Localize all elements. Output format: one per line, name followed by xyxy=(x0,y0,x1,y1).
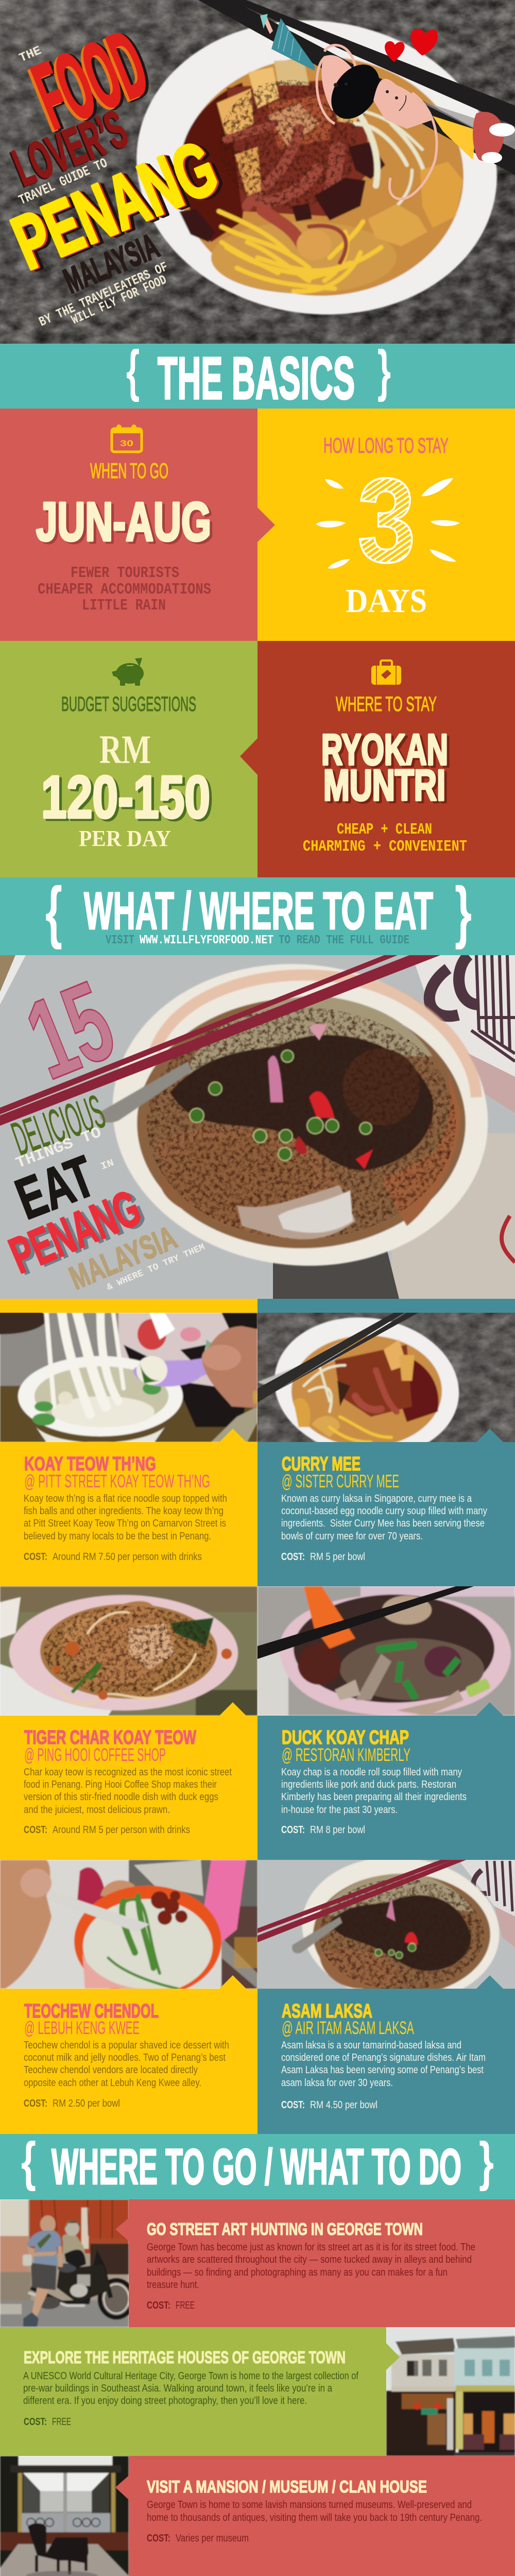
food card: asam laksa xyxy=(258,1848,515,2134)
title: LOVER'S: LOVER’S xyxy=(6,99,135,197)
description xyxy=(147,2242,475,2291)
label: when to go: WHEN TO GO xyxy=(90,459,168,483)
description: and the juiciest, most delicious prawn. xyxy=(24,1804,170,1816)
section banner: the basics: THE BASICS xyxy=(158,345,355,412)
reasons list: FEWER TOURISTS xyxy=(71,564,179,582)
title: MALAYSIA: MALAYSIA xyxy=(58,226,164,301)
icon: maroon chopsticks xyxy=(258,1860,466,1942)
panel: where to stay xyxy=(240,641,515,877)
panel: how long to stay xyxy=(258,409,515,641)
cost: FREE xyxy=(176,2300,195,2311)
title: and where to try them: & WHERE TO TRY THEM xyxy=(106,1242,207,1293)
stall name: @ PING HOOI COFFEE SHOP xyxy=(24,1745,166,1765)
photo: chendol xyxy=(0,1860,258,1989)
title: 15: 15 xyxy=(10,957,130,1104)
section banner: the basics: { xyxy=(126,339,140,402)
text panel: asam laksa xyxy=(258,1989,515,2134)
activity card: mansion museum clan house xyxy=(0,2456,515,2576)
title block: 15 delicious things to eat in Penang: DELICIOUS xyxy=(6,1086,111,1165)
title: THE: THE xyxy=(18,44,44,65)
section banner: where to go / what to do: } xyxy=(479,2131,494,2192)
description: in-house for the past 30 years. xyxy=(281,1804,398,1816)
description xyxy=(147,2499,482,2523)
link line: visit site to read guide: TO READ THE FULL GUIDE xyxy=(279,934,409,947)
title block: the food lover's travel guide to Penang Malaysia xyxy=(1,10,229,330)
title: penang: PENANG xyxy=(2,1179,148,1284)
dish name: KOAY TEOW TH’NG xyxy=(24,1453,156,1475)
cost xyxy=(147,2300,195,2311)
icon: chopsticks xyxy=(258,1313,418,1402)
icon: calendar: 30 xyxy=(120,438,133,448)
text panel: mansion xyxy=(129,2456,515,2576)
panel: when to go xyxy=(0,409,275,641)
section banner: where to go / what to do: { xyxy=(21,2131,36,2192)
icon: chopsticks xyxy=(258,1586,474,1659)
section banner: the basics: } xyxy=(377,339,391,402)
cost: RM 4.50 per bowl xyxy=(310,2099,377,2111)
description: Teochew chendol vendors are located directly xyxy=(24,2064,198,2076)
value: RM: RM xyxy=(99,727,151,772)
divider colour strip above food grid xyxy=(0,1299,515,1313)
cost: Around RM 7.50 per person with drinks xyxy=(53,1551,202,1563)
activity name: VISIT A MANSION / MUSEUM / CLAN HOUSE xyxy=(147,2477,427,2496)
cost: Around RM 5 per person with drinks xyxy=(53,1824,190,1836)
icon: hearts xyxy=(385,29,438,62)
section banner: the basics xyxy=(0,339,515,412)
dish name: ASAM LAKSA xyxy=(282,2001,372,2022)
icon: cartoon man on chopsticks xyxy=(373,79,515,199)
value: ryokan muntri: MUNTRI xyxy=(323,761,445,809)
cost: COST: xyxy=(281,2099,305,2111)
description: opposite each other at Lebuh Keng Kwee alley. xyxy=(24,2077,201,2089)
cost xyxy=(24,2098,120,2109)
icon: piggy bank xyxy=(112,658,144,686)
description xyxy=(24,1493,227,1542)
cost: RM 5 per bowl xyxy=(310,1551,365,1563)
description: believed by many locals to be the best in Penang. xyxy=(24,1531,211,1542)
description: treasure hunt. xyxy=(147,2279,199,2291)
text panel: teochew chendol xyxy=(0,1989,258,2134)
link line: visit site to read guide: WWW.WILLFLYFORFOOD.NET xyxy=(140,934,273,947)
dish name: TIGER CHAR KOAY TEOW xyxy=(24,1727,196,1749)
features list: CHARMING + CONVENIENT xyxy=(303,838,467,856)
icon: suitcase xyxy=(371,660,401,685)
food card: koay teow th'ng xyxy=(0,1303,258,1586)
description: buildings — so finding and photographing as many as you can makes for a fun xyxy=(147,2267,448,2278)
dish name: CURRY MEE xyxy=(282,1453,360,1475)
photo: heritage shophouses xyxy=(386,2327,515,2456)
title block: 15 delicious things to eat in Penang xyxy=(2,957,207,1297)
photo: curry mee xyxy=(258,1313,515,1442)
stall name: @ LEBUH KENG KWEE xyxy=(24,2018,140,2038)
description: Kimberly has been preparing all their ingredients xyxy=(281,1791,467,1803)
description: Teochew chendol is a popular shaved ice dessert with xyxy=(24,2040,229,2051)
cost: COST: xyxy=(24,1551,47,1563)
description xyxy=(281,1493,487,1542)
cost: COST: xyxy=(24,1824,47,1836)
value: per day: PER DAY xyxy=(79,826,171,851)
description: Char koay teow is recognized as the most iconic street xyxy=(24,1767,232,1778)
title: in: IN xyxy=(99,1157,115,1173)
title: eat: EAT xyxy=(8,1144,103,1231)
food card: tiger char koay teow xyxy=(0,1586,258,1860)
description: A UNESCO World Cultural Heritage City, George Town is home to the largest collection of xyxy=(23,2370,358,2382)
link line: visit site to read guide: VISIT xyxy=(106,934,134,947)
cost xyxy=(281,1824,365,1836)
value: big 3: 3 xyxy=(357,454,416,587)
description: coconut milk and jelly noodles. Two of Penang’s best xyxy=(24,2052,226,2063)
cost: COST: xyxy=(24,2098,47,2109)
title: will fly for food: WILL FLY FOR FOOD xyxy=(69,272,169,328)
description xyxy=(281,1767,467,1816)
stall name: @ RESTORAN KIMBERLY xyxy=(282,1745,410,1765)
label: where to stay: WHERE TO STAY xyxy=(336,693,437,716)
description xyxy=(23,2370,358,2406)
cost: COST: xyxy=(147,2533,170,2544)
description: pre-war buildings in Southeast Asia. Walking around town, it feels like you’re in a xyxy=(23,2383,333,2394)
icon: sunburst rays around 3 xyxy=(316,478,460,569)
cost: COST: xyxy=(147,2300,170,2311)
cost xyxy=(147,2533,249,2544)
photo: char koay teow xyxy=(0,1586,258,1716)
value: ryokan muntri xyxy=(321,725,448,809)
photo: man with street art motorbike xyxy=(0,2199,129,2327)
text panel: heritage houses xyxy=(0,2327,386,2456)
text panel: koay teow th'ng xyxy=(0,1442,258,1586)
activity name: EXPLORE THE HERITAGE HOUSES OF GEORGE TOWN xyxy=(24,2348,346,2367)
title: by the traveleaters: BY THE TRAVELEATERS OF xyxy=(37,259,170,330)
description: asam laksa for over 30 years. xyxy=(281,2077,393,2089)
cost xyxy=(281,1551,365,1563)
cost: RM 8 per bowl xyxy=(310,1824,365,1836)
features list: CHEAP + CLEAN xyxy=(337,821,432,839)
description: fish balls and other ingredients. The koay teow th’ng xyxy=(24,1505,224,1517)
description: Koay chap is a noodle roll soup filled with many xyxy=(281,1767,462,1778)
description: different era. If you enjoy doing street photography, then you’ll love it here. xyxy=(23,2395,307,2406)
dish name: TEOCHEW CHENDOL xyxy=(24,2001,159,2022)
photo: duck koay chap xyxy=(258,1586,515,1716)
description xyxy=(24,1767,232,1816)
photo: asam laksa xyxy=(258,1860,515,1989)
stall name: @ PITT STREET KOAY TEOW TH’NG xyxy=(24,1471,210,1492)
value: ryokan muntri: RYOKAN xyxy=(321,725,448,774)
hero panel: 15 delicious things to eat, asam laksa photo xyxy=(0,945,515,1299)
photo: mansion interior xyxy=(0,2456,129,2576)
description: at Pitt Street Koay Teow Th’ng on Carnarvon Street is xyxy=(24,1518,226,1529)
food card: duck koay chap xyxy=(258,1586,515,1860)
link line: visit site to read guide xyxy=(106,934,409,947)
cost: FREE xyxy=(52,2416,71,2428)
cost xyxy=(24,2416,71,2428)
title: things to: THINGS TO xyxy=(13,1124,104,1173)
cost: COST: xyxy=(281,1824,305,1836)
description: Known as curry laksa in Singapore, curry mee is a xyxy=(281,1493,472,1504)
cost: COST: xyxy=(281,1551,305,1563)
description: Koay teow th’ng is a flat rice noodle soup topped with xyxy=(24,1493,227,1504)
section banner: what / where to eat xyxy=(0,873,515,955)
dish name: DUCK KOAY CHAP xyxy=(282,1727,409,1749)
title: TRAVEL GUIDE TO: TRAVEL GUIDE TO xyxy=(16,156,110,209)
reasons list xyxy=(38,564,211,615)
section banner: what / where to eat: { xyxy=(45,873,62,950)
features list xyxy=(303,821,467,856)
description: version of this stir-fried noodle dish with duck eggs xyxy=(24,1791,218,1803)
hero panel: food lover's guide title over curry mee photo xyxy=(0,0,515,344)
value: days: DAYS xyxy=(346,582,427,620)
icon: calendar xyxy=(112,425,142,452)
value: 120-150: 120-150 xyxy=(41,764,210,831)
activity card: heritage houses xyxy=(0,2327,515,2456)
icon: cartoon girl on chopsticks xyxy=(260,14,389,128)
cost: RM 2.50 per bowl xyxy=(53,2098,120,2109)
reasons list: CHEAPER ACCOMMODATIONS xyxy=(38,581,211,599)
title: malaysia: MALAYSIA xyxy=(64,1218,182,1297)
text panel: street art hunting xyxy=(129,2199,515,2327)
cost: COST: xyxy=(24,2416,47,2428)
value: jun-aug: JUN-AUG xyxy=(36,492,211,552)
text panel: curry mee xyxy=(258,1442,515,1586)
description xyxy=(281,2040,486,2089)
text panel: tiger char koay teow xyxy=(0,1716,258,1860)
food card: curry mee xyxy=(258,1306,515,1586)
description: food in Penang. Ping Hooi Coffee Shop makes their xyxy=(24,1779,217,1790)
description: Asam laksa is a sour tamarind-based laksa and xyxy=(281,2040,461,2051)
cost: Varies per museum xyxy=(176,2533,249,2544)
hero background: stone table and bowl xyxy=(0,0,515,344)
activity name: GO STREET ART HUNTING IN GEORGE TOWN xyxy=(147,2219,423,2239)
photo: koay teow th'ng xyxy=(0,1313,258,1442)
icon: chopsticks xyxy=(198,0,515,175)
activity card: street art hunting xyxy=(0,2199,515,2327)
description xyxy=(24,2040,229,2089)
description: bowls of curry mee for over 70 years. xyxy=(281,1531,423,1542)
reasons list: LITTLE RAIN xyxy=(82,597,166,615)
description: ingredients like pork and duck parts. Restoran xyxy=(281,1779,456,1790)
title: PENANG: PENANG xyxy=(1,125,229,285)
cost xyxy=(281,2099,377,2111)
stall name: @ SISTER CURRY MEE xyxy=(282,1471,399,1492)
stall name: @ AIR ITAM ASAM LAKSA xyxy=(282,2018,414,2038)
text panel: duck koay chap xyxy=(258,1716,515,1860)
section banner: what / where to eat: } xyxy=(455,873,472,950)
label: budget suggestions: BUDGET SUGGESTIONS xyxy=(61,693,196,716)
food card: teochew chendol xyxy=(0,1860,258,2134)
panel: budget suggestions xyxy=(0,641,258,877)
icon: maroon chopsticks xyxy=(0,955,440,1126)
